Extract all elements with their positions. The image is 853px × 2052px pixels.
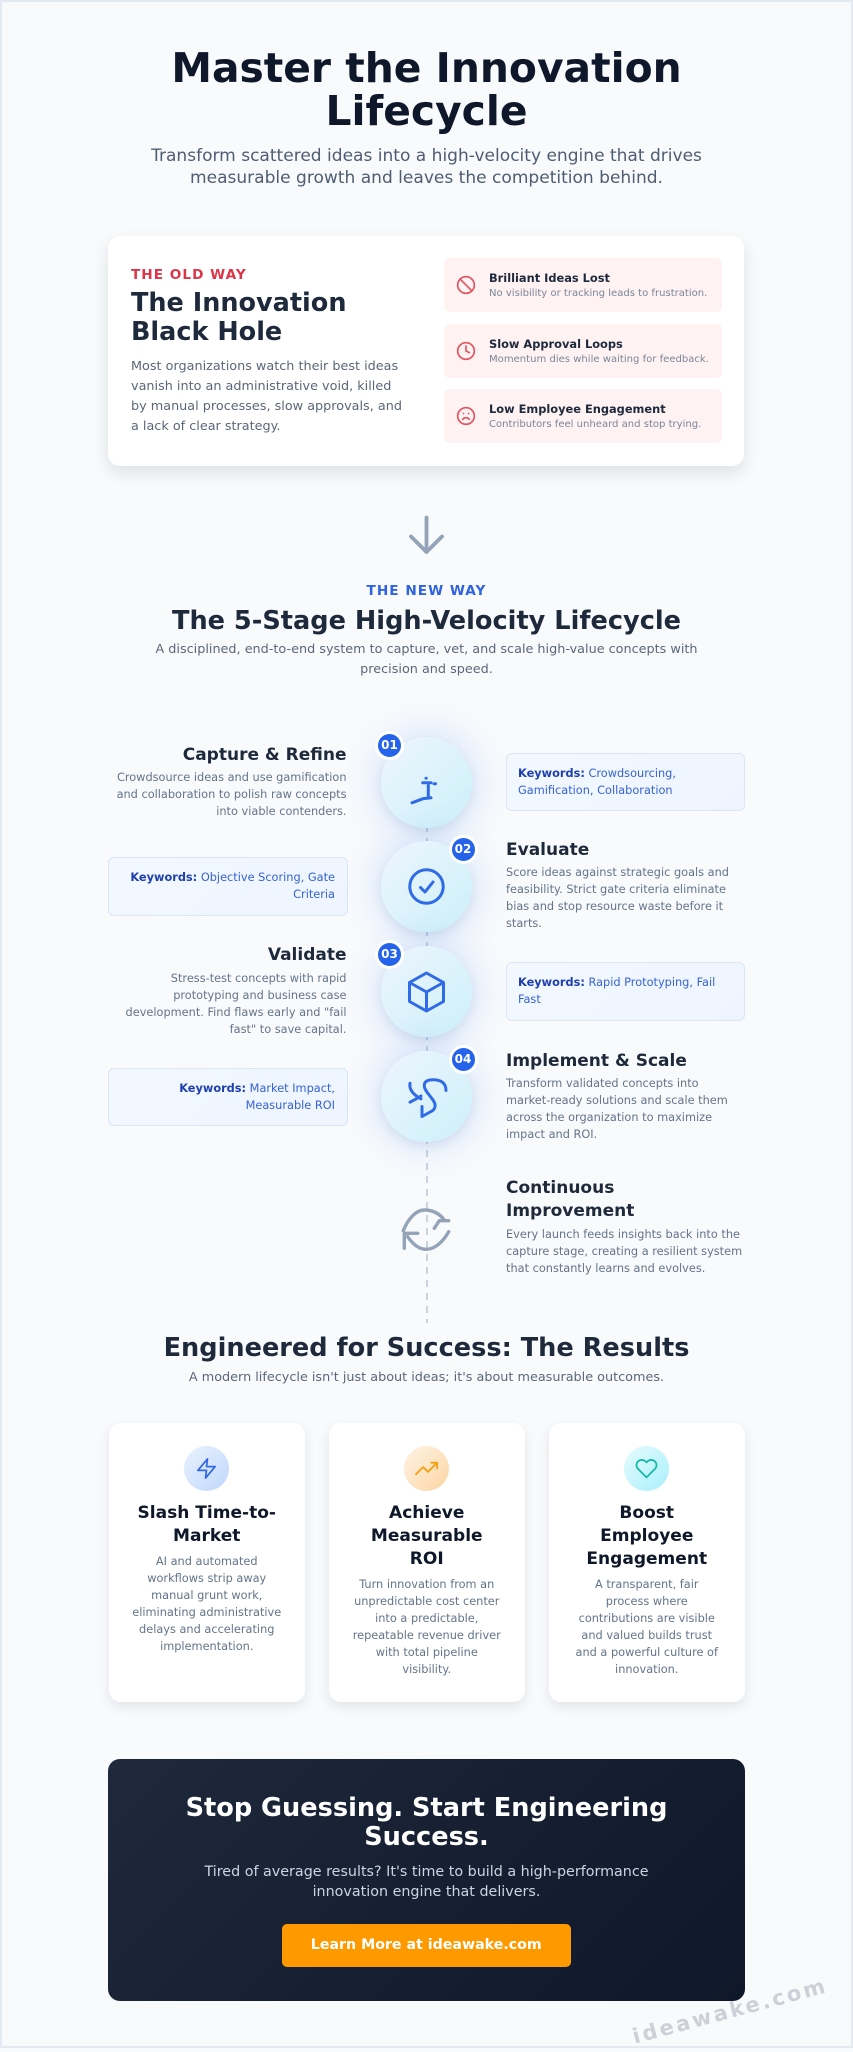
cta description: innovation engine that delivers. xyxy=(313,1884,540,1900)
timeline dashed line xyxy=(426,828,428,1323)
card description: repeatable revenue driver xyxy=(353,1628,501,1642)
cta button xyxy=(282,1924,570,1967)
watermark: ideawake.com xyxy=(630,1973,830,2049)
cta heading xyxy=(186,1792,667,1852)
new way label: THE NEW WAY xyxy=(367,582,486,598)
old way description xyxy=(131,359,402,434)
card description: unpredictable cost center xyxy=(354,1594,499,1608)
stage description: and collaboration to polish raw concepts xyxy=(117,787,346,801)
icon: check circle xyxy=(408,868,445,905)
card title xyxy=(137,1502,276,1546)
card description: workflows strip away xyxy=(147,1571,266,1585)
stage 2: evaluate xyxy=(108,828,729,946)
stage number xyxy=(448,834,478,864)
card title: Slash Time-to- xyxy=(137,1502,276,1522)
stage description: fast" to save capital. xyxy=(230,1022,346,1036)
arrow: old way to new way xyxy=(409,516,444,554)
card description: delays and accelerating xyxy=(139,1622,274,1636)
keywords xyxy=(506,753,745,811)
card: slash time-to-market xyxy=(109,1422,304,1702)
problem description: Contributors feel unheard and stop trying. xyxy=(489,419,701,430)
icon: refresh loop xyxy=(402,1208,450,1251)
stage title: Capture & Refine xyxy=(183,745,346,765)
subtitle xyxy=(151,146,702,188)
keywords: Criteria xyxy=(293,887,335,901)
icon: capture figure xyxy=(410,776,437,804)
card description: process where xyxy=(606,1594,688,1608)
card description: innovation. xyxy=(615,1662,678,1676)
title: Lifecycle xyxy=(325,87,528,135)
cta heading: Stop Guessing. Start Engineering xyxy=(186,1792,667,1822)
problem description: No visibility or tracking leads to frustration. xyxy=(489,288,707,299)
old way heading: Black Hole xyxy=(131,317,282,347)
card title: Boost xyxy=(619,1502,674,1522)
call to action panel xyxy=(108,1759,745,2001)
card: boost employee engagement xyxy=(549,1422,744,1702)
stage description: development. Find flaws early and "fail xyxy=(126,1004,346,1018)
stage title xyxy=(506,1178,634,1220)
results cards xyxy=(108,1438,746,1708)
stage circle xyxy=(381,946,472,1036)
old way description: a lack of clear strategy. xyxy=(131,419,280,434)
stage description: Score ideas against strategic goals and xyxy=(506,865,729,879)
title xyxy=(171,44,682,135)
title: Master the Innovation xyxy=(171,44,682,92)
stage title: Continuous xyxy=(506,1178,614,1198)
new way description: precision and speed. xyxy=(360,662,493,677)
keywords: Keywords: Market Impact, xyxy=(179,1081,335,1095)
card description: and valued builds trust xyxy=(581,1628,712,1642)
stage description: Every launch feeds insights back into the xyxy=(506,1226,740,1240)
icon: box xyxy=(408,972,445,1012)
keywords xyxy=(108,1068,348,1126)
stage description: into viable contenders. xyxy=(216,804,346,818)
icon: implement knot xyxy=(408,1078,448,1118)
stage description xyxy=(126,970,346,1036)
stage description: Transform validated concepts into xyxy=(506,1076,699,1090)
card description: Turn innovation from an xyxy=(359,1577,494,1591)
stage description xyxy=(506,865,729,930)
stage number xyxy=(375,940,404,968)
card description xyxy=(353,1577,501,1676)
problem: brilliant ideas lost xyxy=(444,258,722,312)
stage description xyxy=(117,770,346,818)
card description: with total pipeline xyxy=(376,1645,478,1659)
new way description xyxy=(155,642,698,677)
stage description: capture stage, creating a resilient system xyxy=(506,1244,742,1258)
problem title: Slow Approval Loops xyxy=(489,336,623,350)
stage description: starts. xyxy=(506,916,542,930)
card description: contributions are visible xyxy=(579,1611,715,1625)
stage description xyxy=(506,1226,742,1274)
keywords xyxy=(506,962,745,1020)
stage 4: implement and scale xyxy=(108,1038,728,1156)
card title xyxy=(586,1502,707,1568)
stage circle xyxy=(381,736,472,828)
card title: Market xyxy=(173,1526,240,1546)
card title: Employee xyxy=(600,1526,693,1546)
card title xyxy=(371,1502,483,1568)
old way description: by manual processes, slow approvals, and xyxy=(131,399,402,414)
card description: visibility. xyxy=(402,1662,451,1676)
stage description: across the organization to maximize xyxy=(506,1110,712,1124)
new way heading: The 5-Stage High-Velocity Lifecycle xyxy=(172,606,681,636)
icon: trending up xyxy=(404,1446,449,1490)
subtitle: measurable growth and leaves the competition behind. xyxy=(190,168,663,188)
card description: implementation. xyxy=(160,1639,253,1653)
problem title: Low Employee Engagement xyxy=(489,402,666,416)
card title: ROI xyxy=(410,1548,444,1568)
stage description: impact and ROI. xyxy=(506,1127,597,1141)
panel: the old way xyxy=(108,236,744,466)
icon: clock xyxy=(456,342,476,360)
stage number: 04 xyxy=(455,1052,471,1066)
keywords: Keywords: Crowdsourcing, xyxy=(518,766,676,780)
stage title: Validate xyxy=(268,945,346,965)
card title: Engagement xyxy=(586,1548,707,1568)
stage number xyxy=(448,1044,478,1074)
stage description: prototyping and business case xyxy=(173,988,346,1002)
stage number xyxy=(375,730,404,760)
new way description: A disciplined, end-to-end system to capture, vet, and scale high-value concepts with xyxy=(155,642,698,657)
card description: and a powerful culture of xyxy=(576,1645,718,1659)
icon: frown xyxy=(456,406,476,426)
stage description: Crowdsource ideas and use gamification xyxy=(117,770,346,784)
icon: lightning bolt xyxy=(184,1446,229,1490)
stage title: Improvement xyxy=(506,1200,634,1220)
card: achieve measurable roi xyxy=(329,1422,524,1702)
problem title: Brilliant Ideas Lost xyxy=(489,271,610,285)
keywords: Measurable ROI xyxy=(246,1098,335,1112)
problem: low employee engagement xyxy=(444,389,722,443)
old way heading xyxy=(131,288,346,347)
stage 5: continuous improvement xyxy=(402,1178,742,1274)
icon: slash circle xyxy=(456,276,476,294)
keywords: Keywords: Rapid Prototyping, Fail xyxy=(518,975,715,989)
keywords: Gamification, Collaboration xyxy=(518,783,673,797)
stage number: 01 xyxy=(381,738,398,752)
stage description: feasibility. Strict gate criteria eliminate xyxy=(506,882,726,896)
card description xyxy=(132,1554,281,1653)
card description: into a predictable, xyxy=(375,1611,478,1625)
results description: A modern lifecycle isn't just about ideas; it's about measurable outcomes. xyxy=(189,1370,664,1385)
stage circle xyxy=(381,1050,472,1142)
stage circle xyxy=(381,840,472,932)
cta description xyxy=(204,1864,649,1900)
problem description: Momentum dies while waiting for feedback. xyxy=(489,354,709,364)
cta description: Tired of average results? It's time to build a high-performance xyxy=(204,1864,649,1880)
timeline xyxy=(108,723,745,1323)
old way description: vanish into an administrative void, killed xyxy=(131,379,391,394)
stage number: 03 xyxy=(381,946,398,960)
stage 3: validate xyxy=(126,933,745,1051)
keywords: Fast xyxy=(518,992,541,1006)
stage 1: capture and refine xyxy=(117,723,745,842)
card description: AI and automated xyxy=(156,1554,258,1568)
stage description: market-ready solutions and scale them xyxy=(506,1093,728,1107)
subtitle: Transform scattered ideas into a high-velocity engine that drives xyxy=(151,146,702,166)
icon: heart xyxy=(624,1446,669,1490)
cta button: Learn More at ideawake.com xyxy=(311,1937,542,1953)
stage description: Stress-test concepts with rapid xyxy=(171,970,346,984)
keywords xyxy=(108,857,348,916)
card description: A transparent, fair xyxy=(595,1577,699,1591)
card title: Achieve xyxy=(389,1502,464,1522)
problem: slow approval loops xyxy=(444,324,722,378)
card description xyxy=(576,1577,718,1676)
results heading: Engineered for Success: The Results xyxy=(164,1333,689,1363)
keywords: Keywords: Objective Scoring, Gate xyxy=(130,870,335,884)
stage title: Implement & Scale xyxy=(506,1051,687,1071)
cta heading: Success. xyxy=(364,1822,489,1852)
card description: manual grunt work, xyxy=(151,1588,262,1602)
stage description: bias and stop resource waste before it xyxy=(506,899,723,913)
stage number: 02 xyxy=(455,842,471,856)
stage description xyxy=(506,1076,728,1141)
card title: Measurable xyxy=(371,1526,483,1546)
old way description: Most organizations watch their best ideas xyxy=(131,359,398,374)
old way label: THE OLD WAY xyxy=(131,266,247,282)
card description: eliminating administrative xyxy=(132,1605,281,1619)
stage title: Evaluate xyxy=(506,840,589,860)
old way heading: The Innovation xyxy=(131,288,346,318)
stage description: that constantly learns and evolves. xyxy=(506,1260,705,1274)
